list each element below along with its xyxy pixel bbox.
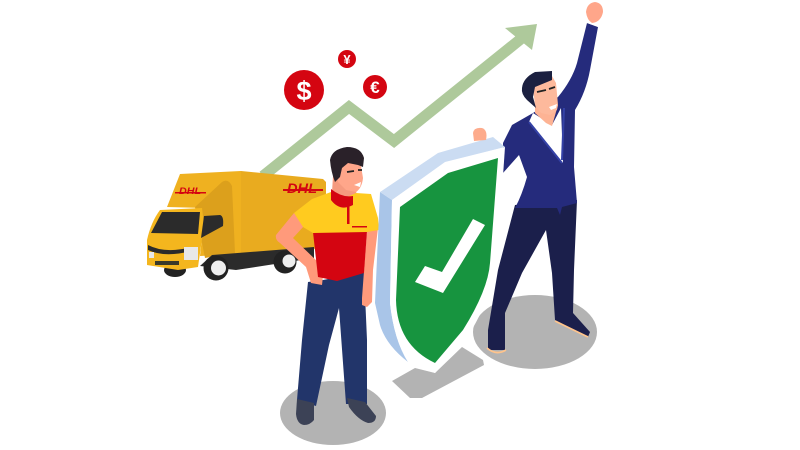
DHL logo side: DHL	[287, 180, 317, 196]
delivery truck	[147, 171, 326, 280]
icon: euro coin: €	[370, 78, 380, 97]
collar	[331, 189, 353, 208]
shield face	[390, 147, 505, 373]
right shoe	[347, 398, 376, 423]
white shirt	[529, 108, 563, 163]
left arm	[276, 213, 323, 285]
growth arrow	[263, 24, 537, 176]
grille	[148, 245, 192, 254]
shoe soles	[487, 321, 588, 353]
rear wheel	[274, 250, 296, 274]
trousers and shoes	[488, 200, 590, 350]
windshield	[151, 212, 200, 234]
DHL logo front: DHL	[179, 186, 201, 196]
shield green	[396, 158, 498, 363]
ground shadow: manager	[473, 295, 597, 369]
shield	[375, 137, 505, 373]
neck	[535, 105, 558, 126]
hair	[330, 147, 364, 182]
manager figure	[487, 2, 603, 353]
icon: yen coin: ¥	[343, 52, 351, 67]
front wheel	[204, 256, 228, 280]
far front wheel	[164, 263, 186, 277]
eyes and smile	[537, 87, 555, 92]
right arm	[362, 228, 378, 307]
check mark	[415, 219, 485, 293]
face	[338, 160, 363, 192]
lapel	[529, 108, 564, 163]
trousers	[297, 272, 367, 406]
DHL logo front	[175, 186, 206, 196]
ground shadow: courier	[280, 381, 386, 445]
left shoe	[296, 399, 314, 425]
icon: yen coin	[338, 50, 356, 68]
icon: dollar coin: $	[296, 76, 312, 106]
icon: euro coin	[363, 75, 387, 99]
cargo front	[167, 171, 241, 256]
cargo side	[241, 171, 326, 254]
red shirt body	[313, 231, 367, 281]
face	[533, 76, 558, 115]
courier figure	[276, 147, 379, 425]
shirt logo	[352, 226, 367, 228]
hair	[522, 71, 552, 108]
jacket	[503, 23, 598, 215]
eyes and smile	[347, 170, 362, 172]
raised fist	[586, 2, 603, 27]
shield side	[375, 192, 408, 362]
cab	[147, 208, 204, 270]
icon: dollar coin	[284, 70, 324, 110]
yellow shirt	[294, 192, 379, 233]
manager hand on shield	[473, 128, 486, 141]
shield top edge	[380, 137, 505, 200]
side window	[201, 215, 223, 238]
neck	[332, 176, 358, 201]
ground shadow: shield	[392, 347, 484, 398]
chassis	[200, 247, 314, 270]
